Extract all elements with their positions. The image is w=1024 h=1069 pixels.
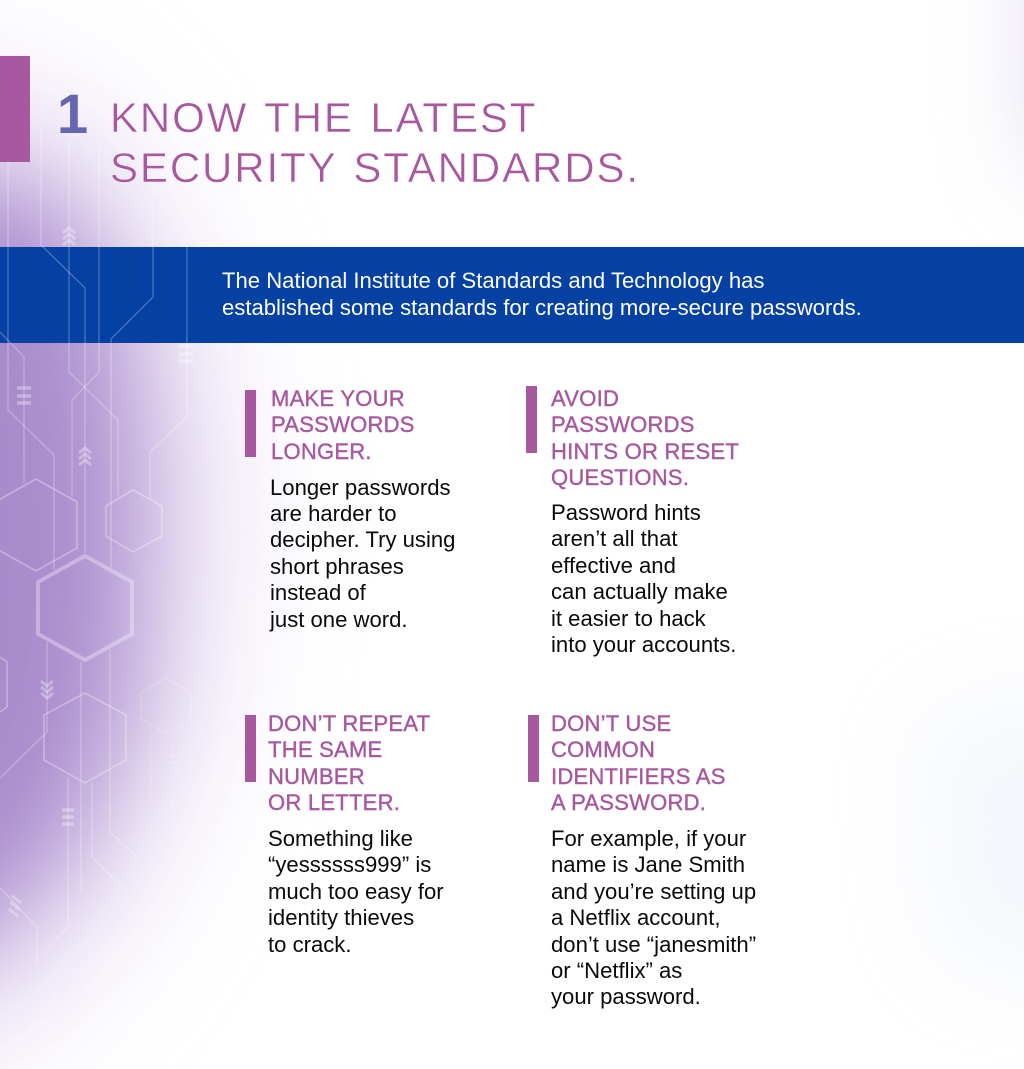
heading: PASSWORDS <box>551 412 695 437</box>
section number: 1 <box>57 82 88 145</box>
panel: avoid hints <box>526 386 739 657</box>
blue banner <box>0 247 1024 343</box>
body text: to crack. <box>268 932 352 957</box>
body text <box>269 475 455 632</box>
heading: MAKE YOUR <box>271 386 405 411</box>
title: SECURITY STANDARDS. <box>110 144 640 191</box>
heading: DON’T REPEAT <box>268 711 430 736</box>
panel: don't repeat <box>245 711 444 957</box>
body text: it easier to hack <box>551 606 706 631</box>
body text: name is Jane Smith <box>551 852 745 877</box>
body text: your password. <box>551 984 701 1009</box>
accent bar <box>245 715 256 782</box>
heading: COMMON <box>551 737 655 762</box>
body text: just one word. <box>270 607 408 632</box>
title: KNOW THE LATEST <box>110 94 537 141</box>
heading: IDENTIFIERS AS <box>551 764 726 789</box>
heading: A PASSWORD. <box>551 790 706 815</box>
body text: short phrases <box>270 554 404 579</box>
heading: LONGER. <box>271 439 372 464</box>
body text <box>268 826 444 957</box>
banner text <box>222 268 862 320</box>
heading: OR LETTER. <box>268 790 400 815</box>
heading <box>550 711 726 815</box>
heading: HINTS OR RESET <box>551 439 739 464</box>
body text: or “Netflix” as <box>551 958 682 983</box>
accent bar <box>526 386 537 453</box>
body text: don’t use “janesmith” <box>551 932 756 957</box>
panel: common identifiers <box>528 711 756 1009</box>
body text: aren’t all that <box>551 526 678 551</box>
heading <box>271 386 415 464</box>
body text: a Netflix account, <box>551 905 720 930</box>
heading: AVOID <box>551 386 619 411</box>
body text <box>551 826 756 1009</box>
body text: effective and <box>551 553 676 578</box>
heading: DON’T USE <box>551 711 671 736</box>
accent bar <box>245 390 256 457</box>
heading <box>268 711 430 815</box>
heading: QUESTIONS. <box>551 465 689 490</box>
panel: make passwords longer <box>245 386 455 632</box>
accent block <box>0 56 30 162</box>
body text: “yessssss999” is <box>268 852 431 877</box>
heading: NUMBER <box>268 764 365 789</box>
body text: much too easy for <box>268 879 444 904</box>
body text: Password hints <box>551 500 701 525</box>
body text <box>551 500 736 657</box>
body text: instead of <box>270 580 366 605</box>
heading: PASSWORDS <box>271 412 415 437</box>
body text: are harder to <box>270 501 396 526</box>
title <box>110 94 640 191</box>
body text: Something like <box>268 826 413 851</box>
body text: decipher. Try using <box>270 527 455 552</box>
heading <box>550 386 739 490</box>
body text: can actually make <box>551 579 728 604</box>
body text: into your accounts. <box>551 632 736 657</box>
body text: Longer passwords <box>270 475 451 500</box>
accent bar <box>528 715 539 782</box>
banner text: The National Institute of Standards and Technology has <box>222 268 764 293</box>
body text: For example, if your <box>551 826 746 851</box>
banner text: established some standards for creating more-secure passwords. <box>222 295 862 320</box>
body text: identity thieves <box>268 905 414 930</box>
body text: and you’re setting up <box>551 879 756 904</box>
heading: THE SAME <box>268 737 382 762</box>
